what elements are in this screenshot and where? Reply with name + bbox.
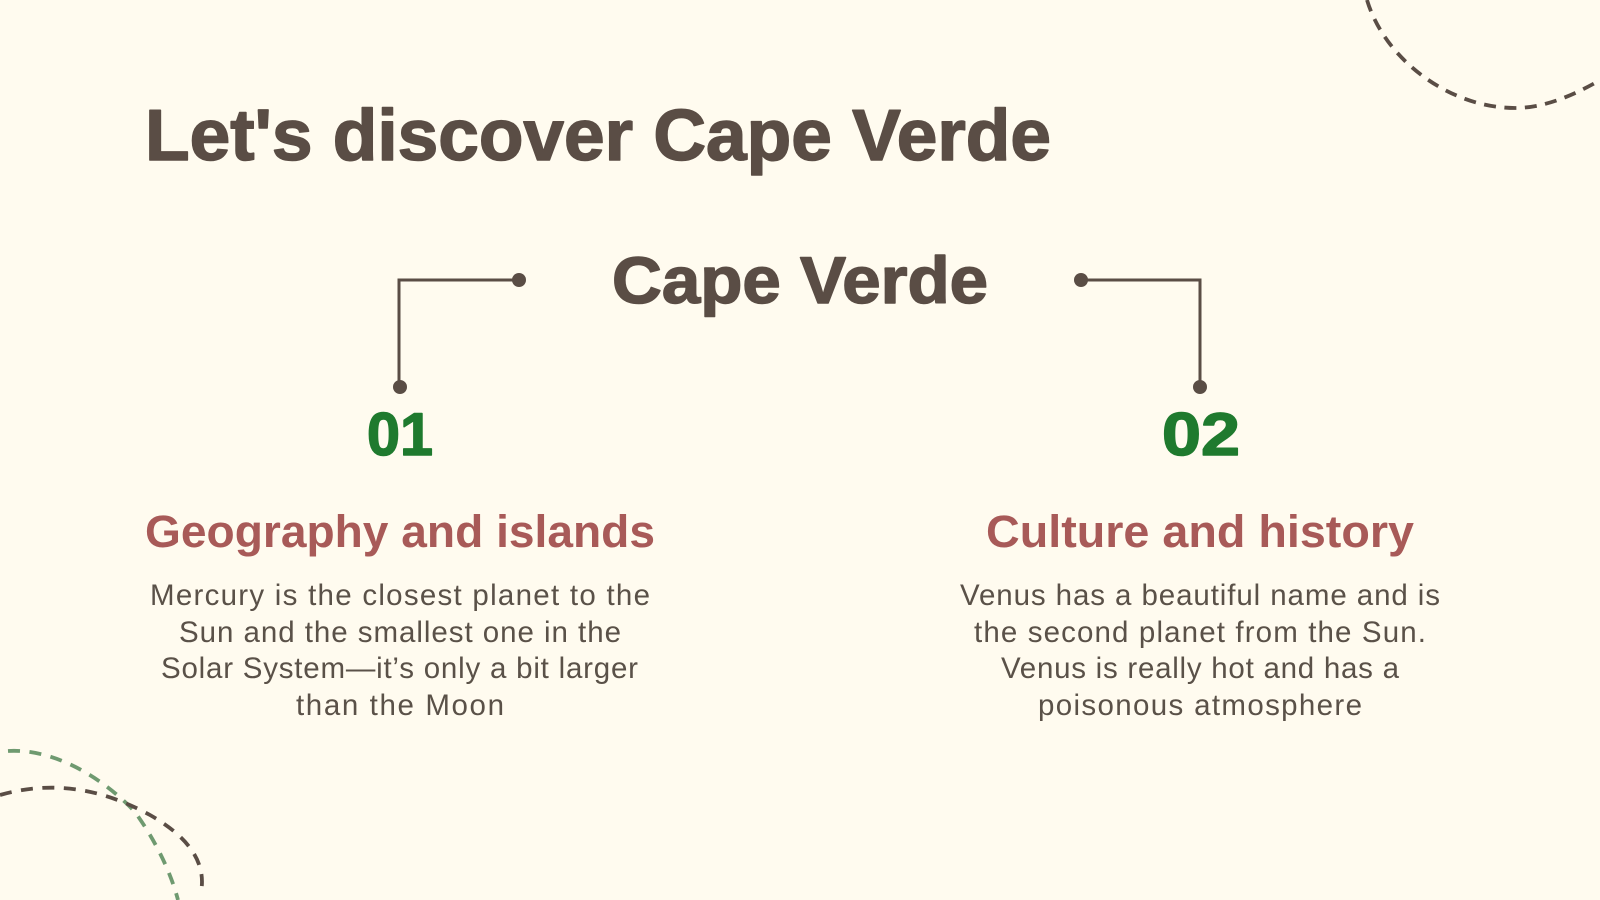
panel: culture and history xyxy=(960,401,1440,722)
description: culture: Venus has a beautiful name and is xyxy=(960,579,1440,612)
description: culture: poisonous atmosphere xyxy=(1038,689,1362,722)
decoration: bottom left dashed arcs xyxy=(0,751,202,900)
description: culture: Venus is really hot and has a xyxy=(1001,652,1400,685)
description: culture xyxy=(960,579,1440,722)
description: geography: than the Moon xyxy=(296,689,504,722)
connector: left xyxy=(393,273,526,394)
decoration: top right dashed arc xyxy=(1367,0,1600,108)
description: geography: Solar System—it’s only a bit larger xyxy=(161,652,638,685)
heading: culture: Culture and history xyxy=(986,506,1414,557)
description: geography xyxy=(150,579,650,722)
number 01: 01 xyxy=(367,401,433,468)
title: Let's discover Cape Verde xyxy=(145,96,1051,176)
description: geography: Mercury is the closest planet to the xyxy=(150,579,650,612)
description: culture: the second planet from the Sun. xyxy=(974,616,1426,649)
description: geography: Sun and the smallest one in the xyxy=(179,616,621,649)
central topic: Cape Verde: Cape Verde xyxy=(612,243,988,317)
number 02: 02 xyxy=(1162,401,1240,468)
connector: right xyxy=(1074,273,1207,394)
heading: geography: Geography and islands xyxy=(145,506,655,557)
panel: geography and islands xyxy=(145,401,655,722)
